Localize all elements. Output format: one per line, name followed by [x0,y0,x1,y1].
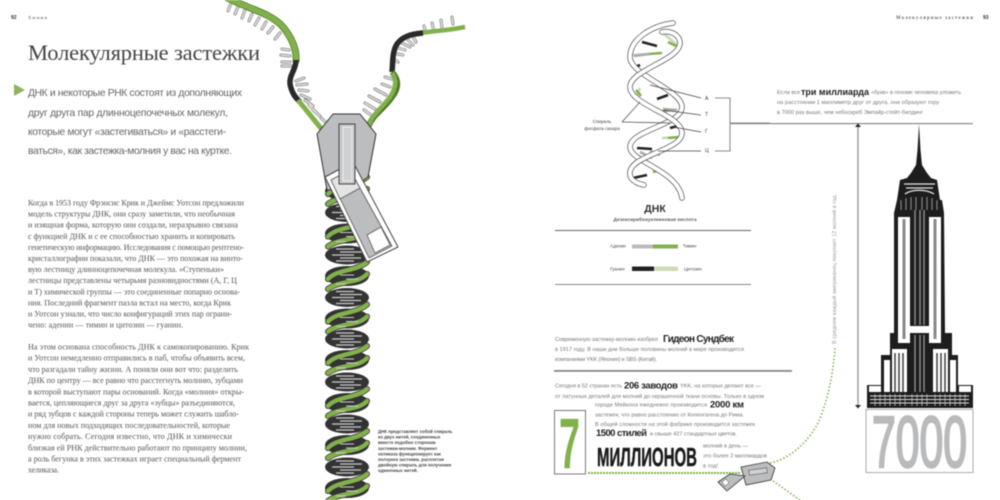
leader lines [622,85,701,151]
label: sugar-phosphate spiral: фосфата сахара [584,126,620,131]
adenine-thymine bar [610,244,697,248]
zipper caption: одиночных нитей. [378,468,418,473]
left page header: 92 [11,15,17,21]
zipper caption: застежки-молнии. Фермент [378,446,438,451]
zipper caption: хеликаза функционирует как [378,451,442,456]
body text paragraph two: ном для новых подходящих последовательностей, которые [28,421,230,430]
body text paragraph two: что разгадали тайну жизни. А поняли они вот что: разделить [28,365,238,374]
millions word: МИЛЛИОНОВ [597,442,697,472]
dotted strands [770,348,835,463]
labels: bases: Т [705,112,708,118]
factories text: 206 заводов [624,380,678,392]
left page header: Химия [28,15,48,20]
body text paragraph one [28,198,245,330]
body text paragraph one: с функцией ДНК и с ее способностью хранить и копировать [28,232,235,241]
inventor text: компаниями YKK (Япония) и SBS (Китай). [555,356,657,363]
factories text: YKK, на которых делают все — [680,384,761,390]
three billion text: три миллиарда [801,87,870,97]
building silhouette [867,124,973,408]
lede with green marker: друг друга пар длинноцепочечных молекул, [28,108,228,119]
millions note [703,442,767,470]
right page header: Молекулярные застежки [896,16,973,21]
labels: bases: Г [705,129,708,135]
zipper caption: ползунок застежки, расплетая [378,457,444,462]
body text paragraph one: лестницы представлены четырьмя разновидностями (А, Г, Ц [28,276,237,285]
closed zipper line [588,472,740,474]
body text paragraph one: и Т) химической группы — это соединенные попарно основа- [28,287,240,296]
body text paragraph one: генетическую информацию. Исследования с помощью рентгено- [28,243,244,252]
small pull tab [718,474,745,491]
zipper DNA illustration [226,0,465,500]
label: sugar-phosphate spiral: Спираль [593,119,612,124]
Empire State Building [867,124,973,408]
guanine-cytosine bar [610,266,702,272]
left zipper strand [226,0,323,131]
inventor text: Современную застежку-молнию изобрел [555,337,658,343]
lower panels [915,335,924,392]
factories text: застежек, что равно расстоянию от Копенгагена до Рима. [595,412,744,418]
factories text: и свыше 427 стандартных цветов. [650,432,737,438]
body text paragraph one: модель структуры ДНК, они сразу заметили, что необычная [28,210,235,219]
body text paragraph one: чено: аденин — тимин и цитозин — гуанин. [28,321,183,330]
body text paragraph two: а роль бегунка в этих застежках играет специальный фермент [28,454,241,464]
small zipper with dotted path [588,348,835,500]
label: sugar-phosphate spiral [584,119,620,131]
body text paragraph two: ДНК по центру — все равно что расстегнуть молнию, зубцами [28,376,244,385]
DNA subheading: Дезоксирибонуклеиновая кислота [614,216,697,222]
zipper caption [378,429,453,473]
zipper caption: двойную спираль для получения [378,463,452,468]
body text paragraph two [28,342,249,475]
labels: bases: А [705,96,709,102]
lede with green marker: ваться», как застежка-молния у вас на куртке. [28,146,232,157]
body text paragraph two: вается, цепляющиеся друг за друга «зубцы» разъединяются, [28,398,235,408]
icon: green triangle marker [14,84,25,96]
legend of base pairs [555,230,751,285]
left page header [11,15,48,21]
labels: bases: Ц [705,148,709,154]
height line and arrow [730,123,973,408]
inventor text: в 1917 году. В наши дни больше половины молний в мире производится [555,346,744,353]
guanine-cytosine bar: Гуанин [610,266,625,272]
three billion text [777,87,961,116]
vertical note: В среднем каждый американец покупает 12 молний в год. [831,194,838,344]
body text paragraph one: вую лестницу длинноцепочечная молекула. «Ступеньки» [28,265,224,274]
zipper caption: из двух нитей, соединенных [378,435,441,440]
crown details [904,184,935,194]
three billion text: Если все [777,90,800,96]
body text paragraph two: и ряд зубцов с каждой стороны теперь может служить шабло- [28,410,239,419]
millions note: это более 2 миллиардов [703,454,767,460]
DNA heading: ДНК [644,203,666,215]
three billion text: в 7000 раз выше, чем небоскреб Эмпайр-стейт-билдинг [777,109,923,116]
body text paragraph two: близкая ей РНК действительно работают по принципу молнии, [28,443,247,452]
right zipper strand [368,27,465,127]
right page header [896,15,989,21]
lede with green marker: ДНК и некоторые РНК состоят из дополняющих [28,88,243,99]
bracket [715,98,770,151]
slider bar [339,124,355,184]
inventor text: Гидеон Сундбек [663,333,735,345]
body text paragraph two: в которой выступают пары оснований. Когда «молния» откры- [28,387,244,396]
base pair rungs [633,33,680,178]
number 7 box [554,405,586,484]
small slider [741,462,775,485]
adenine-thymine bar: Тимин [683,244,697,248]
DNA diagram [584,23,770,222]
factories text: 2000 км [710,400,744,410]
guanine-cytosine bar: Цитозин [684,266,702,272]
body text paragraph two: нужно собрать. Сегодня известно, что ДНК и химически [28,432,233,441]
body text paragraph one: ния. Последний фрагмент пазла встал на место, когда Крик [28,298,231,307]
body text paragraph one: кристаллографии показали, что ДНК — это похожая на винто- [28,254,243,263]
factories text: Сегодня в 52 странах есть [555,384,622,390]
base grid [870,396,969,403]
millions note: в год! [703,464,718,470]
zipper teeth [228,3,453,124]
double helix body [325,160,369,500]
title: Молекулярные застежки [28,40,260,65]
body text paragraph one: Когда в 1953 году Фрэнсис Крик и Джеймс Уотсон предложили [28,198,245,208]
lede with green marker: которые могут «застегиваться» и «расстеги- [28,127,226,138]
three billion text: на расстоянии 1 миллиметр друг от друга, они образуют гору [777,100,939,106]
zipper slider body [317,114,376,190]
body text paragraph two: На этом основана способность ДНК к самокопированию. Крик [28,342,249,352]
factories text: В общей сложности на этой фабрике производится застежек [595,421,756,428]
right page header: 93 [983,15,989,21]
zipper caption: вместе подобно сторонам [378,440,435,445]
inventor text [555,333,744,363]
body text paragraph one: и Уотсон узнали, что число конфигураций этих пар ограни- [28,310,232,318]
lede with green marker [14,84,243,157]
millions note: молний в день — [703,442,748,450]
factories text [555,380,764,439]
body text paragraph two: хеликаза. [28,466,59,475]
factories text: 1500 стилей [596,428,647,439]
adenine-thymine bar: Аденин [610,244,626,248]
labels: bases [705,96,709,154]
body text paragraph two: и Уотсон немедленно отправились в паб, чтобы объявить всем, [28,354,245,363]
zipper pull tab [325,162,398,262]
number 7 box: 7 [559,405,580,484]
three billion text: «букв» в геноме человека уложить [871,90,961,96]
body text paragraph one: и изящная форма, которую они создали, неразрывно связана [28,221,238,230]
factories text: от латунных деталей для молний до окрашенной ткани основы. Только в одном [555,393,764,400]
upper panels [898,217,910,343]
sugar-phosphate strands [630,23,682,198]
zipper caption: ДНК представляет собой спираль [378,429,453,434]
factories text: городе Мейкона ежедневно производится [595,402,707,408]
